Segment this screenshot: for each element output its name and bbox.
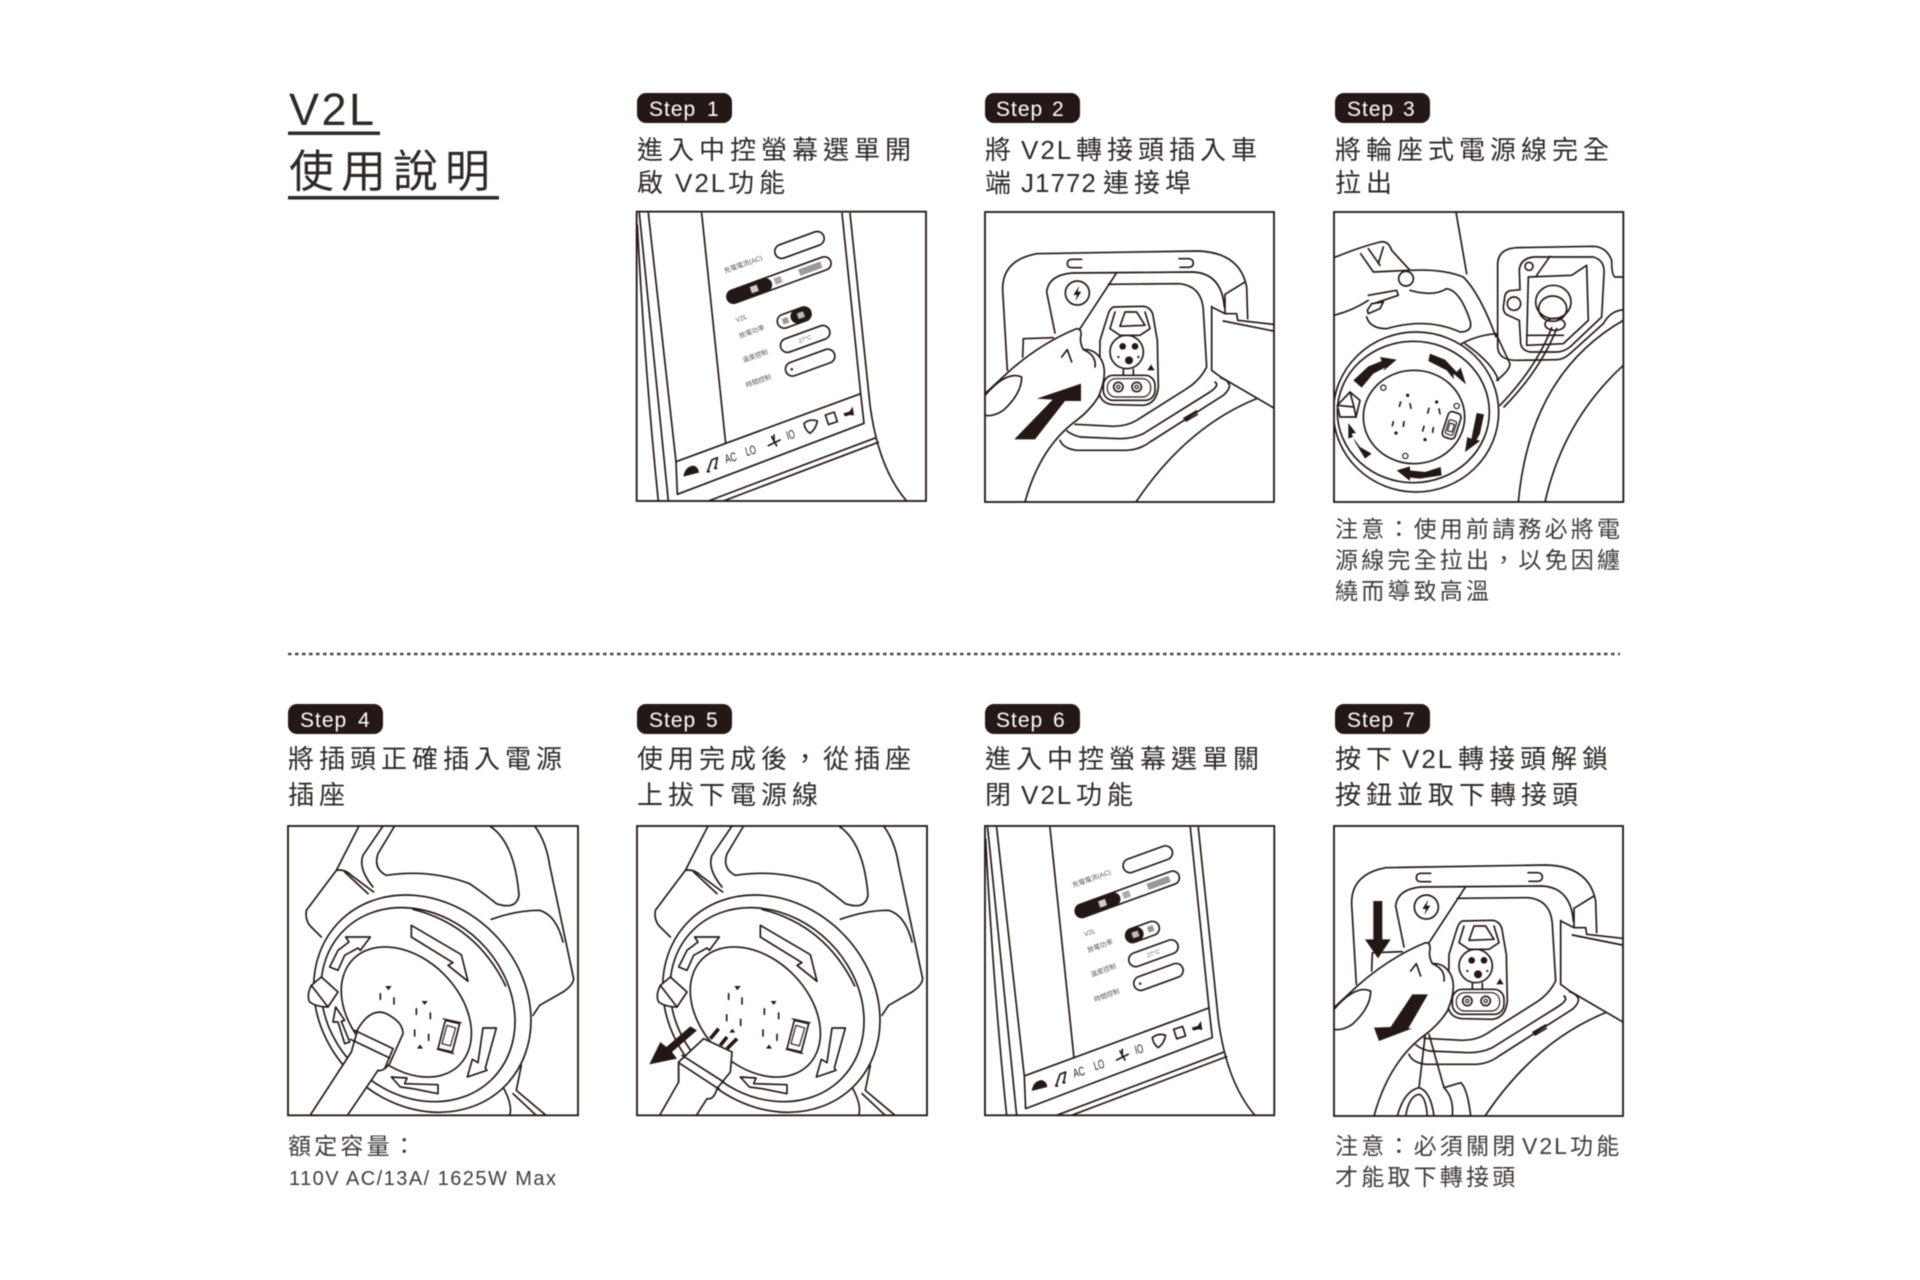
frame xyxy=(1334,212,1623,502)
control pills: 27°C xyxy=(798,335,813,345)
badge: step 2: 2 xyxy=(1052,98,1065,121)
frame xyxy=(985,212,1274,502)
arrow xyxy=(649,1026,697,1064)
connector port xyxy=(1448,920,1507,1019)
heading: step 6: 進入中控螢幕選單關 xyxy=(985,744,1264,774)
icon: bolt xyxy=(1414,895,1438,919)
control pills xyxy=(1073,844,1185,992)
control labels: 時間控制 xyxy=(1093,986,1121,1004)
heading: step 4: 插座 xyxy=(288,780,350,810)
heading: step 3: 將輪座式電源線完全 xyxy=(1335,135,1614,165)
frame xyxy=(637,826,927,1115)
rotation arrows (outline) xyxy=(679,925,845,1094)
arrow xyxy=(1014,384,1081,439)
title: 使用說明 xyxy=(289,146,497,197)
dock icons xyxy=(683,407,854,477)
cable reel xyxy=(1333,332,1499,492)
control labels: 充電電流(AC) xyxy=(723,253,764,275)
dock icons: AC xyxy=(723,450,739,467)
badge: step 7 xyxy=(1335,704,1430,734)
title: V2L xyxy=(289,84,377,135)
heading: step 6: 功能 xyxy=(1076,780,1138,810)
frame xyxy=(288,826,578,1115)
illustration: plugging adapter into J1772 port xyxy=(985,212,1274,502)
illustration: pulling out cable reel xyxy=(1333,212,1623,502)
plug xyxy=(309,1012,403,1117)
plug with prongs xyxy=(659,1029,737,1117)
heading: step 4: 將插頭正確插入電源 xyxy=(288,744,567,774)
note: step 3: 源線完全拉出，以免因纏 xyxy=(1335,547,1623,573)
note: rated capacity: 110V AC/13A/ 1625W Max xyxy=(289,1168,556,1190)
step 4 xyxy=(269,704,578,1190)
title xyxy=(288,84,499,200)
dock icons xyxy=(1032,1021,1202,1091)
illustration: plug inserted into reel socket xyxy=(286,824,580,1118)
badge: step 3: 3 xyxy=(1403,98,1416,121)
badge: step 3: Step xyxy=(1347,98,1394,121)
note: step 7: 才能取下轉接頭 xyxy=(1335,1164,1518,1190)
heading: step 1: V2L xyxy=(675,168,727,198)
step 3 xyxy=(1333,93,1623,604)
rotation arrows xyxy=(1348,354,1484,481)
heading: step 5: 使用完成後，從插座 xyxy=(637,744,916,774)
heading: step 2: V2L xyxy=(1021,135,1073,165)
hand xyxy=(1334,943,1453,1116)
rotation arrows (outline) xyxy=(330,925,496,1094)
step 2 xyxy=(985,93,1274,502)
badge: step 5: 5 xyxy=(706,709,719,732)
control labels: V2L xyxy=(1083,928,1097,939)
heading: step 2: 端 xyxy=(985,168,1016,198)
heading: step 7: V2L xyxy=(1402,744,1454,774)
frame xyxy=(985,826,1274,1115)
control labels xyxy=(1071,867,1121,1004)
badge: step 1: 1 xyxy=(707,98,720,121)
arrow: press down xyxy=(1365,901,1391,958)
frame xyxy=(1334,826,1623,1116)
step 7 xyxy=(1334,704,1623,1190)
heading: step 1: 功能 xyxy=(728,168,790,198)
heading: step 7: 按鈕並取下轉接頭 xyxy=(1335,780,1583,810)
badge: step 6 xyxy=(985,704,1080,734)
control labels: 放電功率 xyxy=(738,323,766,340)
badge: step 2 xyxy=(985,93,1080,123)
dock icons: IO xyxy=(1133,1043,1145,1058)
reel housing xyxy=(306,826,574,1117)
badge: step 4: 4 xyxy=(358,709,371,732)
note: rated capacity xyxy=(288,1133,556,1190)
arrow: pull out xyxy=(1374,994,1428,1041)
badge: step 1: Step xyxy=(649,98,696,121)
charge door xyxy=(1003,251,1273,501)
note: rated capacity: 額定容量： xyxy=(288,1133,419,1159)
badge: step 6: Step xyxy=(996,709,1043,732)
illustration: infotainment screen, V2L off xyxy=(985,826,1274,1115)
heading: step 5: 上拔下電源線 xyxy=(637,780,823,810)
badge: step 2: Step xyxy=(996,98,1043,121)
badge: step 6: 6 xyxy=(1053,709,1066,732)
heading: step 2: 轉接頭插入車 xyxy=(1076,135,1262,165)
divider xyxy=(288,653,1620,655)
control pills xyxy=(725,230,837,378)
control labels xyxy=(723,253,773,390)
illustration: unplugging from reel socket xyxy=(635,824,929,1118)
charge door xyxy=(1352,865,1622,1115)
note: step 7: 功能 xyxy=(1570,1133,1622,1159)
dock icons: AC xyxy=(1072,1064,1087,1081)
frame xyxy=(637,212,926,501)
heading: step 1: 進入中控螢幕選單開 xyxy=(637,135,916,165)
reel housing xyxy=(655,826,923,1117)
heading: step 7: 轉接頭解鎖 xyxy=(1458,744,1613,774)
heading: step 1: 啟 xyxy=(637,168,668,198)
control labels: 溫度控制 xyxy=(741,347,769,365)
hanging adapter xyxy=(1397,1031,1471,1116)
icon: bolt xyxy=(1065,281,1089,305)
control labels: 溫度控制 xyxy=(1089,961,1118,979)
connector port xyxy=(1099,306,1158,405)
heading: step 2: J1772 xyxy=(1021,168,1097,198)
control labels: V2L xyxy=(735,313,749,324)
badge: step 5: Step xyxy=(649,709,696,732)
badge: step 7: 7 xyxy=(1403,709,1416,732)
step 5 xyxy=(635,703,929,1118)
illustration: pressing unlock and removing adapter xyxy=(1334,826,1623,1116)
dock icons: LO xyxy=(1092,1058,1106,1074)
control labels: 充電電流(AC) xyxy=(1071,867,1112,890)
control labels: 時間控制 xyxy=(744,372,773,390)
note: step 7: V2L xyxy=(1522,1133,1569,1159)
dock icons: LO xyxy=(744,444,758,459)
badge: step 5 xyxy=(637,704,732,734)
badge: step 4: Step xyxy=(300,709,347,732)
heading: step 3: 拉出 xyxy=(1335,168,1397,198)
note: step 3: 注意：使用前請務必將電 xyxy=(1335,516,1623,542)
illustration: infotainment screen, V2L on xyxy=(637,212,926,501)
reel xyxy=(656,893,882,1114)
heading: step 2: 連接埠 xyxy=(1103,168,1196,198)
note: step 7: 注意：必須關閉 xyxy=(1335,1133,1518,1159)
dock icons: IO xyxy=(785,429,797,443)
badge: step 7: Step xyxy=(1347,709,1394,732)
badge: step 4 xyxy=(288,704,383,734)
hand holding reel handle xyxy=(1334,242,1510,380)
reel xyxy=(306,893,533,1114)
control pills: 27°C xyxy=(1146,949,1162,959)
control labels: 放電功率 xyxy=(1086,937,1114,955)
heading: step 7: 按下 xyxy=(1335,744,1397,774)
heading: step 6: 閉 xyxy=(985,780,1016,810)
hand xyxy=(985,329,1104,502)
step 6 xyxy=(985,704,1274,1115)
badge: step 3 xyxy=(1335,93,1430,123)
vehicle port and cable xyxy=(1456,212,1623,502)
step 1 xyxy=(637,93,926,501)
heading: step 6: V2L xyxy=(1021,780,1073,810)
note: step 3: 繞而導致高溫 xyxy=(1335,578,1492,604)
badge: step 1 xyxy=(637,93,732,123)
heading: step 2: 將 xyxy=(985,135,1016,165)
